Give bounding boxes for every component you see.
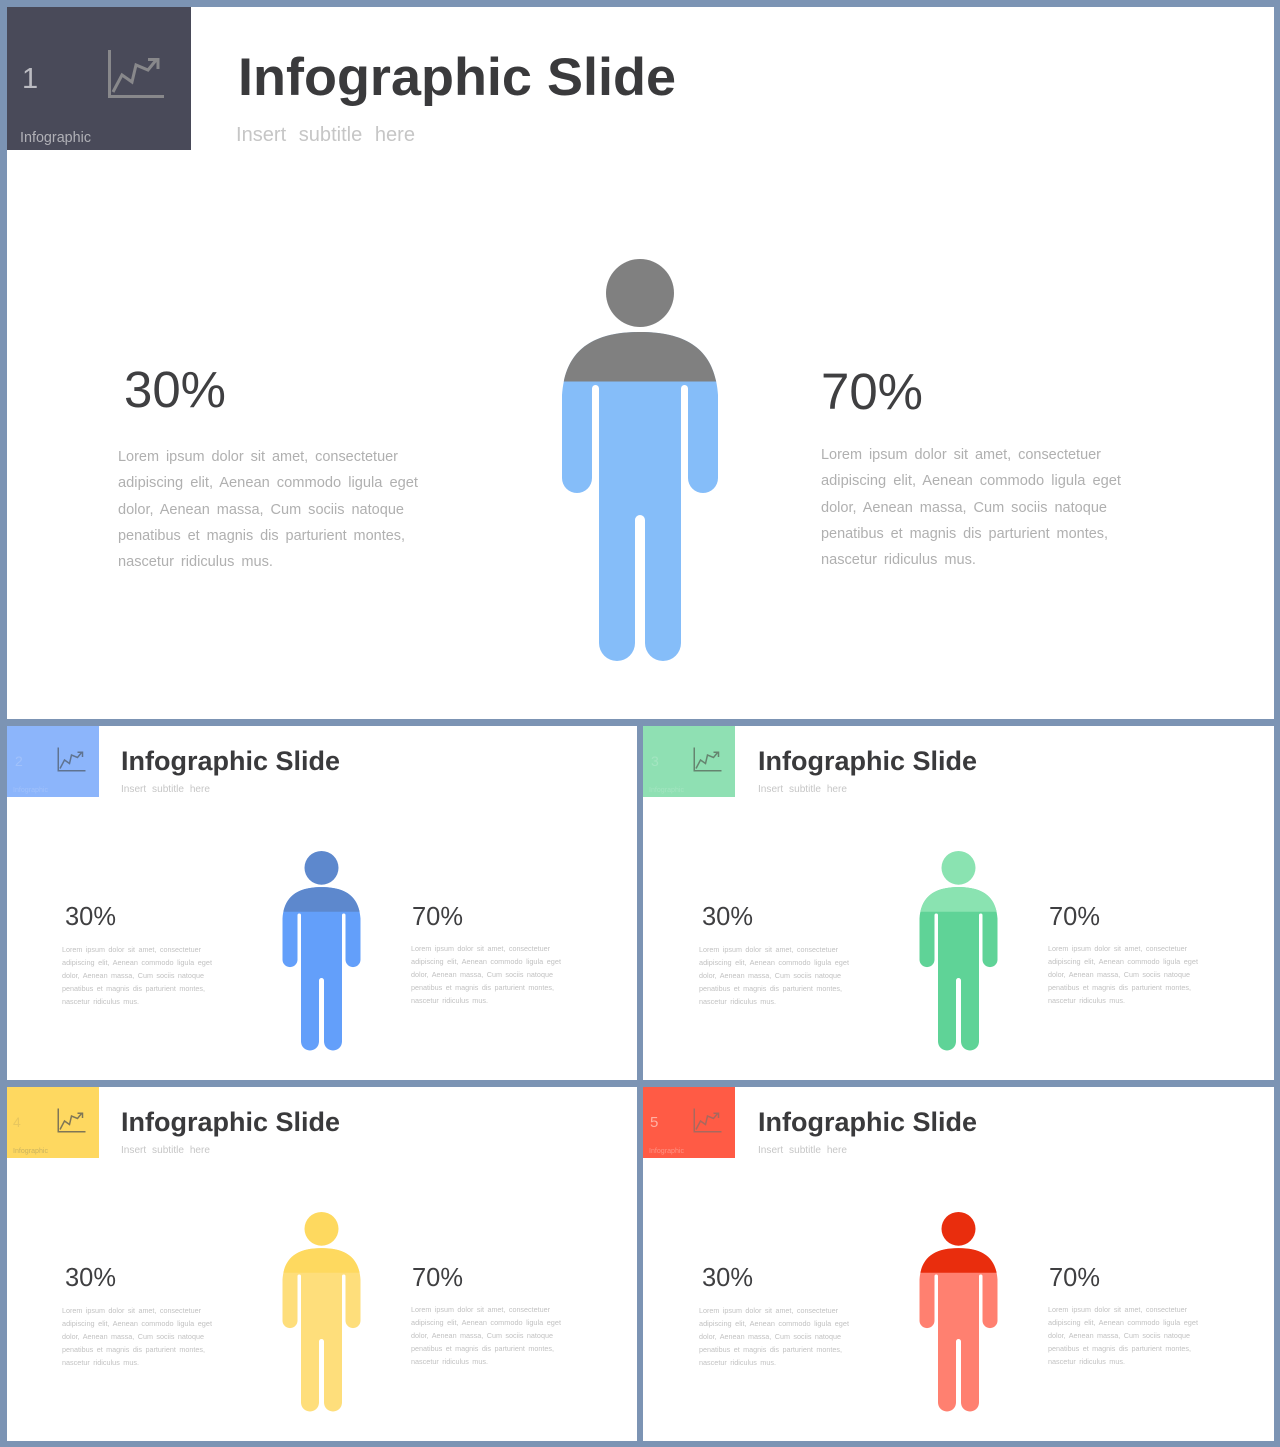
header tab: slide 2 (7, 726, 99, 797)
right text block: Lorem ipsum dolor sit amet, consectetuer (821, 446, 1101, 463)
left text block: nascetur ridiculus mus. (118, 553, 273, 570)
left text block: dolor, Aenean massa, Cum sociis natoque (699, 1332, 841, 1341)
right text block: Lorem ipsum dolor sit amet, consectetuer (411, 1305, 550, 1314)
right percentage: 70% (412, 1264, 463, 1292)
right percentage: 70% (821, 363, 923, 420)
header tab: slide 5: Infographic (649, 1148, 684, 1155)
right text block (411, 1305, 562, 1366)
left text block (699, 1306, 850, 1367)
left text block: adipiscing elit, Aenean commodo ligula eget (699, 1319, 850, 1328)
left text block (62, 945, 213, 1006)
right text block: adipiscing elit, Aenean commodo ligula eget (1048, 957, 1199, 966)
header tab: slide 5 (643, 1087, 735, 1158)
left percentage: 30% (702, 903, 753, 931)
panel: slide 4 yellow (7, 1087, 637, 1441)
left text block: penatibus et magnis dis parturient montes, (62, 984, 205, 993)
right text block: dolor, Aenean massa, Cum sociis natoque (821, 499, 1107, 516)
left text block: penatibus et magnis dis parturient montes, (62, 1345, 205, 1354)
right text block: penatibus et magnis dis parturient montes, (411, 983, 554, 992)
right text block (821, 446, 1122, 568)
left text block: nascetur ridiculus mus. (699, 997, 776, 1006)
header tab: slide 4 (7, 1087, 99, 1158)
subtitle: Insert subtitle here (758, 784, 847, 795)
right text block: nascetur ridiculus mus. (1048, 1357, 1125, 1366)
right text block: adipiscing elit, Aenean commodo ligula eget (821, 472, 1122, 489)
header tab: slide 3 (643, 726, 735, 797)
panel: main slide (7, 7, 1274, 719)
person figure: yellow (282, 1212, 360, 1411)
panel: slide 5 red (643, 1087, 1274, 1441)
right text block: adipiscing elit, Aenean commodo ligula eget (1048, 1318, 1199, 1327)
left text block (62, 1306, 213, 1367)
left text block: Lorem ipsum dolor sit amet, consectetuer (118, 448, 398, 465)
left text block: adipiscing elit, Aenean commodo ligula eget (62, 1319, 213, 1328)
header tab: slide 2: 2 (15, 753, 23, 769)
header tab: slide 3: 3 (651, 753, 659, 769)
left text block: adipiscing elit, Aenean commodo ligula eget (118, 474, 419, 491)
left percentage: 30% (124, 361, 226, 418)
right text block (411, 944, 562, 1005)
left text block: nascetur ridiculus mus. (62, 1358, 139, 1367)
left text block: adipiscing elit, Aenean commodo ligula eget (699, 958, 850, 967)
left percentage: 30% (65, 1264, 116, 1292)
left text block: nascetur ridiculus mus. (699, 1358, 776, 1367)
right percentage: 70% (412, 903, 463, 931)
person figure: 30/70 gray and blue (562, 259, 718, 661)
right text block: adipiscing elit, Aenean commodo ligula eget (411, 1318, 562, 1327)
panel: slide 2 blue (7, 726, 637, 1080)
right text block: nascetur ridiculus mus. (821, 551, 976, 568)
right text block: Lorem ipsum dolor sit amet, consectetuer (1048, 1305, 1187, 1314)
header tab: slide 5: 5 (650, 1114, 658, 1131)
right text block: adipiscing elit, Aenean commodo ligula eget (411, 957, 562, 966)
left text block (699, 945, 850, 1006)
header tab: slide 1 (7, 7, 191, 150)
left text block: penatibus et magnis dis parturient montes, (699, 984, 842, 993)
left text block: Lorem ipsum dolor sit amet, consectetuer (699, 1306, 838, 1315)
right text block: penatibus et magnis dis parturient montes, (821, 525, 1108, 542)
left percentage: 30% (65, 903, 116, 931)
subtitle: Insert subtitle here (236, 124, 415, 146)
right text block: dolor, Aenean massa, Cum sociis natoque (1048, 970, 1190, 979)
left text block: dolor, Aenean massa, Cum sociis natoque (699, 971, 841, 980)
panel: slide 3 green (643, 726, 1274, 1080)
title: Infographic Slide (238, 48, 676, 107)
left percentage: 30% (702, 1264, 753, 1292)
right text block (1048, 1305, 1199, 1366)
left text block: dolor, Aenean massa, Cum sociis natoque (62, 971, 204, 980)
header tab: slide 3: Infographic (649, 787, 684, 794)
subtitle: Insert subtitle here (121, 1145, 210, 1156)
person figure: blue (282, 851, 360, 1050)
right text block: nascetur ridiculus mus. (411, 996, 488, 1005)
left text block: Lorem ipsum dolor sit amet, consectetuer (62, 1306, 201, 1315)
right text block: nascetur ridiculus mus. (1048, 996, 1125, 1005)
title: Infographic Slide (121, 1107, 340, 1137)
right text block: Lorem ipsum dolor sit amet, consectetuer (411, 944, 550, 953)
header tab: slide 1: Infographic (20, 129, 91, 146)
header tab: slide 2: Infographic (13, 787, 48, 794)
right text block: Lorem ipsum dolor sit amet, consectetuer (1048, 944, 1187, 953)
subtitle: Insert subtitle here (121, 784, 210, 795)
right text block (1048, 944, 1199, 1005)
person figure: green (920, 851, 998, 1050)
person figure: red (920, 1212, 998, 1411)
left text block: dolor, Aenean massa, Cum sociis natoque (118, 501, 404, 518)
right text block: dolor, Aenean massa, Cum sociis natoque (411, 970, 553, 979)
title: Infographic Slide (758, 746, 977, 776)
left text block: Lorem ipsum dolor sit amet, consectetuer (699, 945, 838, 954)
right percentage: 70% (1049, 1264, 1100, 1292)
right text block: dolor, Aenean massa, Cum sociis natoque (411, 1331, 553, 1340)
right percentage: 70% (1049, 903, 1100, 931)
left text block: penatibus et magnis dis parturient montes, (699, 1345, 842, 1354)
left text block: dolor, Aenean massa, Cum sociis natoque (62, 1332, 204, 1341)
header tab: slide 4: Infographic (13, 1148, 48, 1155)
left text block: nascetur ridiculus mus. (62, 997, 139, 1006)
right text block: nascetur ridiculus mus. (411, 1357, 488, 1366)
title: Infographic Slide (121, 746, 340, 776)
left text block: adipiscing elit, Aenean commodo ligula eget (62, 958, 213, 967)
left text block: penatibus et magnis dis parturient montes, (118, 527, 405, 544)
left text block: Lorem ipsum dolor sit amet, consectetuer (62, 945, 201, 954)
left text block (118, 448, 419, 570)
right text block: penatibus et magnis dis parturient montes, (1048, 983, 1191, 992)
header tab: slide 1: 1 (22, 63, 38, 95)
right text block: penatibus et magnis dis parturient montes, (1048, 1344, 1191, 1353)
title: Infographic Slide (758, 1107, 977, 1137)
header tab: slide 4: 4 (13, 1114, 21, 1130)
right text block: penatibus et magnis dis parturient montes, (411, 1344, 554, 1353)
subtitle: Insert subtitle here (758, 1145, 847, 1156)
right text block: dolor, Aenean massa, Cum sociis natoque (1048, 1331, 1190, 1340)
